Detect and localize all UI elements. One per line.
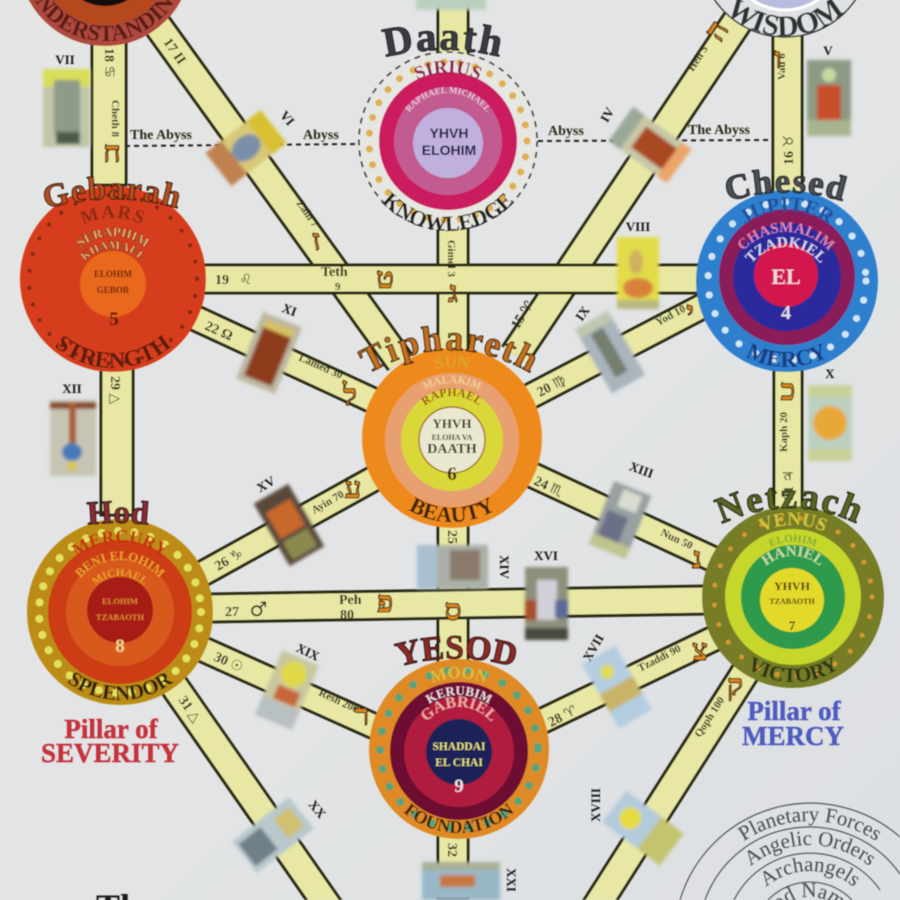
abyss dashed line right: Abyss: [548, 124, 584, 139]
geburah angelic order: SERAPHIM: [76, 226, 150, 248]
letter lamed: ל: [342, 379, 357, 412]
geburah caption: STRENGTH: [55, 334, 172, 369]
geburah dots: [29, 195, 197, 363]
card XI: [236, 300, 302, 394]
path 20: [527, 305, 705, 398]
chokmah discs: [700, 0, 870, 37]
chesed purple ring: [719, 209, 855, 345]
chesed blue ring: [733, 223, 841, 331]
tiphareth god name: ELOHA VA: [432, 433, 473, 442]
pillar of mercy: Pillar of: [747, 696, 842, 726]
label teth: Teth: [321, 265, 348, 280]
label zain: Zain 7: [294, 198, 321, 230]
yesod archangel: GABRIEL: [421, 696, 496, 722]
card VI: [205, 108, 298, 186]
label 14 gimel: Gimel 3: [445, 240, 457, 277]
label cheth: Cheth 8: [109, 100, 121, 137]
yesod number: 9: [454, 776, 464, 797]
sephirah: chokmah: [713, 0, 857, 38]
daath crimson disc: [379, 72, 517, 210]
path 26: [200, 478, 375, 575]
card IX: IX: [572, 303, 593, 324]
netzach caption: VICTORY: [752, 656, 836, 682]
yesod title: YESOD: [393, 634, 517, 666]
path 16: [773, 30, 802, 205]
sephirah: chesed: [696, 168, 879, 372]
letter gimel: ג: [448, 276, 458, 309]
label 17: 17 II: [160, 36, 188, 68]
hod archangel: MICHAEL: [91, 568, 146, 586]
letter samekh: ס: [444, 594, 462, 627]
tiphareth salmon ring: [385, 373, 519, 507]
abyss dashed line left: The Abyss: [130, 128, 192, 143]
label kaph: Kaph 20: [778, 411, 790, 452]
legend concentric circles: [679, 802, 900, 900]
tiphareth center: [419, 407, 485, 473]
letter peh: פ: [377, 586, 393, 619]
label 15: 15 ♈︎: [508, 298, 538, 332]
card XVII: [579, 631, 652, 729]
netzach green ring: [741, 545, 845, 649]
tiphareth god name: [427, 416, 477, 457]
path 19: [200, 265, 705, 293]
path 27: [208, 600, 708, 608]
card top: [416, 0, 486, 10]
yesod god name: SHADDAI: [432, 741, 486, 753]
netzach god name: TZABAOTH: [769, 597, 815, 606]
path 30: [200, 648, 378, 728]
daath center text: YHVH: [430, 125, 468, 141]
geburah planet: MARS: [79, 205, 145, 224]
netzach archangel: HANIEL: [760, 545, 822, 566]
label 21: 21 ♃︎: [781, 470, 797, 500]
legend text: Planetary Forces: [736, 808, 881, 842]
label 27: 27 ♂︎: [225, 597, 267, 621]
card VII: VII: [55, 52, 75, 67]
abyss dashed line left: [125, 128, 358, 146]
tiphareth yellow ring: [401, 389, 503, 491]
label qoph: Qoph 100: [692, 694, 728, 740]
geburah center: [80, 251, 146, 317]
daath title: Daath: [380, 23, 502, 58]
tiphareth angelic order: MALAKIM: [422, 375, 482, 390]
label 20: 20 ♍︎: [534, 372, 568, 401]
label nun: Nun 50: [659, 527, 695, 552]
geburah god name: ELOHIM: [94, 269, 133, 279]
pillar of severity: [41, 714, 179, 768]
card XII: XII: [62, 381, 82, 396]
label 16: 16 ♉︎: [781, 135, 797, 165]
letter zain: ז: [309, 224, 323, 258]
chesed dots: [708, 202, 866, 360]
sephirah: netzach: [702, 486, 885, 689]
hod planet: MERCURY: [70, 530, 170, 556]
netzach disc: [702, 506, 884, 688]
chesed archangel: TZADKIEL: [744, 236, 825, 264]
card X: [808, 366, 852, 461]
netzach number: 7: [789, 618, 796, 633]
card IV: IV: [597, 104, 618, 125]
hod inner ring: [66, 558, 174, 666]
path 29 vertical: [101, 365, 133, 515]
daath caption: KNOWLEDGE: [381, 191, 514, 232]
hod angelic order: BENI ELOHIM: [74, 550, 166, 578]
netzach god name: YHVH: [774, 579, 811, 593]
hod disc: [27, 519, 213, 705]
card XXI: XXI: [504, 868, 519, 892]
letter yod: י: [686, 296, 694, 329]
letter heh: ה: [698, 15, 736, 47]
card XIV: [417, 545, 512, 589]
label 30: 30 ☉︎: [211, 649, 245, 676]
netzach center: [760, 568, 824, 632]
letter ayin: ע: [345, 472, 361, 505]
card XIX: XIX: [294, 640, 322, 664]
chesed caption: MERCY: [745, 342, 826, 368]
netzach dots: [714, 518, 872, 676]
path 24: [530, 474, 715, 560]
netzach title: Netzach: [712, 486, 861, 524]
card XVI: XVI: [534, 548, 558, 563]
geburah archangel: KHAMAEL: [79, 240, 144, 262]
hod caption: SPLENDOR: [68, 672, 174, 701]
card XVI: [525, 548, 568, 640]
daath dashed ring: [359, 52, 537, 230]
tiphareth archangel: RAPHAEL: [420, 388, 480, 406]
yesod disc: [369, 659, 549, 839]
hod number: 8: [115, 636, 125, 657]
chesed number: 4: [781, 302, 791, 324]
path 18: [92, 35, 126, 185]
label 32: 32: [444, 843, 459, 857]
card XX: [232, 797, 330, 873]
card XX: XX: [306, 797, 330, 822]
label heh: Heh 5: [685, 43, 711, 74]
card IV: [597, 104, 691, 183]
label 29: 29 △: [107, 376, 122, 404]
label 25: 25: [444, 530, 459, 544]
yesod navy center: [426, 719, 492, 785]
daath dots: [369, 62, 527, 220]
card XIII: XIII: [627, 459, 656, 481]
netzach angelic order: ELOHIM: [768, 534, 818, 547]
label 26: 26 ♑︎: [212, 546, 246, 574]
card XIV: XIV: [497, 555, 512, 580]
hod dots: [39, 531, 201, 693]
tiphareth planet: SUN: [434, 356, 470, 369]
geburah god name: GEBOR: [97, 285, 130, 295]
card V: V: [823, 43, 833, 58]
daath center text: [422, 125, 476, 158]
pillar of mercy: MERCY: [742, 721, 844, 751]
path 17: [140, 1, 400, 362]
yesod caption: FOUNDATION: [403, 802, 514, 834]
daath planet: SIRIUS: [414, 60, 482, 80]
daath angels: RAPHAEL MICHAEL: [404, 86, 490, 113]
label yod: Yod 10: [654, 303, 688, 329]
letter cheth: ח: [103, 136, 121, 169]
path labels: [101, 36, 797, 857]
letter tzaddi: צ: [692, 634, 708, 667]
pillar of severity: SEVERITY: [41, 738, 179, 768]
letter nun: נ: [692, 542, 702, 575]
chesed disc: [696, 190, 878, 372]
chesed angelic order: CHASMALIM: [738, 221, 836, 252]
card X: X: [825, 366, 835, 381]
yesod dots: [380, 670, 538, 828]
label 28: 28 ♈︎: [546, 702, 580, 731]
hod title: Hod: [86, 500, 150, 526]
yesod red ring: [404, 697, 514, 807]
card XVII: XVII: [579, 631, 607, 664]
netzach planet: VENUS: [757, 512, 828, 532]
label 18: 18 ♋︎: [101, 48, 117, 78]
daath center text: ELOHIM: [422, 142, 476, 158]
geburah disc: [20, 186, 206, 372]
geburah god name: [94, 269, 133, 295]
card IX: [572, 303, 645, 394]
geburah number: 5: [109, 309, 119, 330]
sephirah: binah: [28, 0, 182, 46]
card VIII: VIII: [626, 219, 650, 234]
yesod planet: MOON: [429, 666, 489, 683]
card XII: [50, 381, 96, 476]
sephirah: yesod: [368, 634, 550, 840]
legend text: Angelic Orders: [747, 831, 875, 866]
panel: connecting paths: [92, 0, 802, 900]
card XXI: [422, 862, 519, 900]
card XV: [254, 473, 324, 566]
path 22: [195, 318, 372, 400]
tiphareth disc: [362, 348, 542, 528]
hod center: [87, 577, 153, 643]
card XVIII: [588, 788, 684, 866]
netzach lime ring: [725, 529, 861, 665]
path 28: [540, 638, 715, 722]
card V: [807, 43, 851, 136]
hod god name: ELOHIM: [102, 596, 138, 606]
path central pillar: [438, 0, 468, 898]
legend text: Archangels: [762, 857, 859, 888]
yesod god name: [432, 741, 486, 769]
daath inner disc: [413, 108, 483, 178]
label ayin: Ayin 70: [310, 488, 347, 517]
label tzaddi: Tzaddi 90: [636, 643, 683, 675]
letter teth: ט: [376, 262, 394, 295]
card VII: [43, 52, 90, 147]
yesod god name: EL CHAI: [435, 757, 483, 769]
card VIII: [617, 219, 659, 309]
label teth value: 9: [335, 281, 341, 293]
card XIX: [255, 640, 322, 730]
label 24: 24 ♏︎: [531, 473, 566, 501]
chesed red center: [754, 243, 818, 307]
label 22: 22 Ω: [202, 319, 235, 344]
tiphareth god name: DAATH: [427, 442, 477, 457]
tiphareth title: Tiphareth: [356, 325, 536, 374]
tiphareth god name: YHVH: [432, 416, 472, 431]
sephirah: hod: [26, 500, 214, 706]
sephirah: geburah: [19, 176, 206, 372]
path 21: [774, 360, 802, 510]
hod god name: TZABAOTH: [96, 612, 144, 622]
path 15: [515, 10, 745, 355]
label peh: Peh: [339, 593, 362, 608]
sephirah: daath: [357, 23, 539, 232]
hebrew letters: [103, 15, 795, 732]
path 29: [582, 660, 761, 900]
letter resh: ר: [355, 699, 369, 732]
binah discs: [19, 0, 191, 46]
card XI: XI: [280, 300, 299, 319]
hod god name: [96, 596, 144, 622]
sephirah: tiphareth: [356, 325, 543, 528]
yesod dark ring: [390, 682, 528, 820]
label resh: Resh 200: [317, 687, 361, 716]
netzach god name: [769, 579, 815, 606]
card VI: VI: [277, 108, 298, 128]
tiphareth number: 6: [447, 464, 457, 485]
label lamed: Lamed 30: [297, 352, 345, 382]
path 31: [157, 671, 342, 900]
label 19: 19 ♌︎: [215, 272, 252, 288]
letter qoph: ק: [727, 669, 743, 702]
label peh value: 80: [340, 608, 354, 623]
chesed planet: JUPITER: [740, 196, 834, 225]
tiphareth caption: BEAUTY: [408, 496, 493, 523]
geburah title: Gebarah: [43, 176, 180, 210]
card XV: XV: [254, 473, 278, 495]
abyss dashed line right: [538, 123, 772, 141]
hod red ring: [48, 540, 192, 684]
card XIII: [589, 459, 656, 559]
pillar of severity: Pillar of: [64, 714, 159, 744]
letter vau: ו: [774, 42, 782, 75]
abyss dashed line left: Abyss: [303, 128, 339, 143]
legend text: [736, 808, 881, 900]
abyss dashed line right: The Abyss: [688, 123, 750, 138]
card XVIII: XVIII: [588, 788, 603, 822]
label 31: 31 △: [175, 694, 203, 726]
chesed god name: EL: [771, 264, 801, 289]
letter kaph: כ: [781, 374, 795, 407]
daath middle ring: [394, 87, 502, 195]
pillar of mercy: [742, 696, 844, 751]
chesed title: Chesed: [725, 168, 848, 202]
label vau: Vau 6: [776, 53, 788, 80]
yesod angelic order: KERUBIM: [424, 685, 494, 705]
